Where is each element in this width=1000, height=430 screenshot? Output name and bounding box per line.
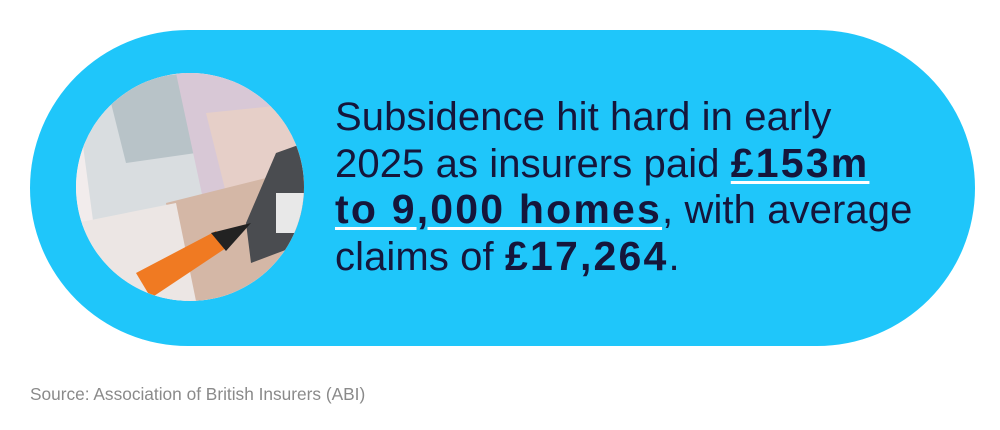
photo: banknotes and pen bbox=[76, 73, 304, 301]
panel: blue pill bbox=[30, 30, 975, 346]
text block: headline statement: claims of £17,264. bbox=[335, 232, 680, 278]
text block: headline statement bbox=[335, 95, 912, 278]
source note: Source: Association of British Insurers (ABI) bbox=[30, 384, 365, 404]
text block: headline statement: to 9,000 homes, with average bbox=[335, 186, 912, 232]
text block: headline statement: 2025 as insurers paid £153m bbox=[335, 140, 869, 186]
text block: headline statement: Subsidence hit hard in early bbox=[335, 95, 831, 139]
